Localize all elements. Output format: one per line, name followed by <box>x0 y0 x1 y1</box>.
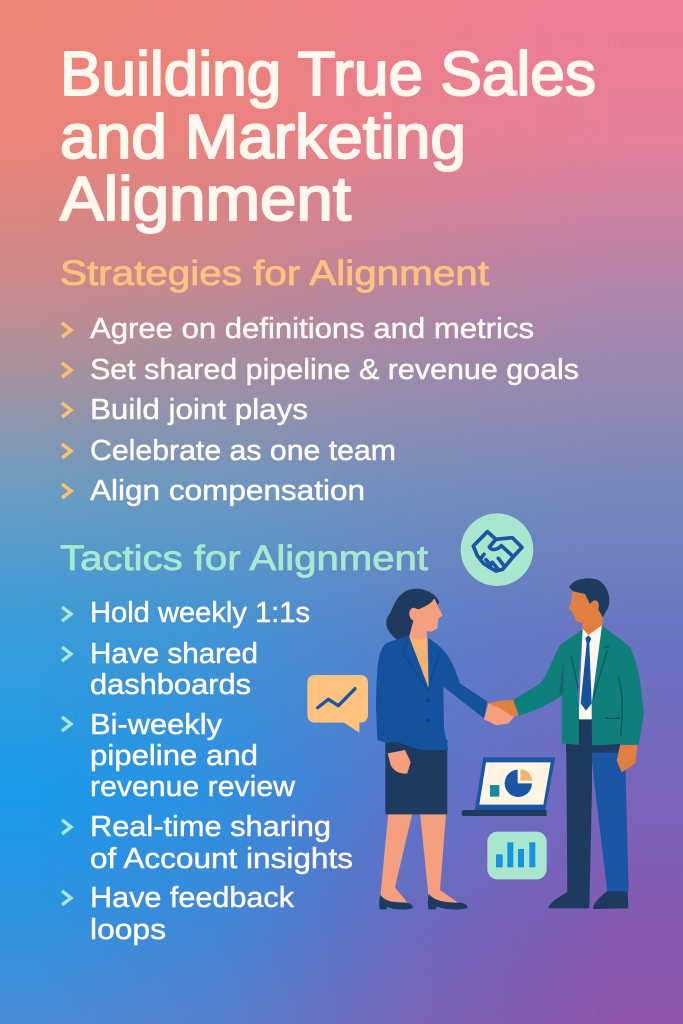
list: tactics: of Account insights <box>90 843 353 875</box>
icon: laptop with pie chart <box>462 757 555 816</box>
list: strategies: Celebrate as one team <box>90 435 396 467</box>
list: tactics: Bi-weekly <box>90 709 223 741</box>
clasped hands <box>484 700 518 725</box>
woman legs and skirt <box>379 740 468 910</box>
title: Building True Sales <box>60 40 596 109</box>
list: strategies: Agree on definitions and metrics <box>90 313 534 345</box>
man jacket and shirt <box>513 625 644 746</box>
man figure <box>513 578 644 909</box>
list: strategies: Align compensation <box>90 475 365 507</box>
list: strategies <box>62 313 579 507</box>
woman blazer <box>376 635 487 750</box>
list: tactics: loops <box>90 914 166 946</box>
list: tactics: Hold weekly 1:1s <box>90 597 310 629</box>
icon: handshake badge <box>461 513 533 586</box>
woman figure <box>376 589 487 910</box>
title: and Marketing <box>60 103 466 172</box>
list: tactics: Real-time sharing <box>90 811 331 843</box>
list: strategies: Set shared pipeline & revenue goals <box>90 354 579 386</box>
man trousers and shoes <box>548 713 629 909</box>
list: tactics: revenue review <box>90 771 296 803</box>
list: tactics <box>62 597 353 946</box>
title <box>60 40 596 234</box>
woman head and hair <box>386 589 443 690</box>
title: Alignment <box>60 165 351 234</box>
list: tactics: Have shared <box>90 638 258 670</box>
woman hand <box>388 750 411 774</box>
heading: tactics: Tactics for Alignment <box>60 539 428 578</box>
man hand <box>617 745 638 772</box>
list: strategies: Build joint plays <box>90 394 308 426</box>
icon: chat bubble with trend line <box>307 675 368 733</box>
man head <box>568 578 609 636</box>
heading: strategies: Strategies for Alignment <box>60 254 489 293</box>
list: tactics: Have feedback <box>90 882 295 914</box>
list: tactics: dashboards <box>90 669 251 701</box>
list: tactics: pipeline and <box>90 740 258 772</box>
icon: bar chart tile <box>487 832 547 879</box>
